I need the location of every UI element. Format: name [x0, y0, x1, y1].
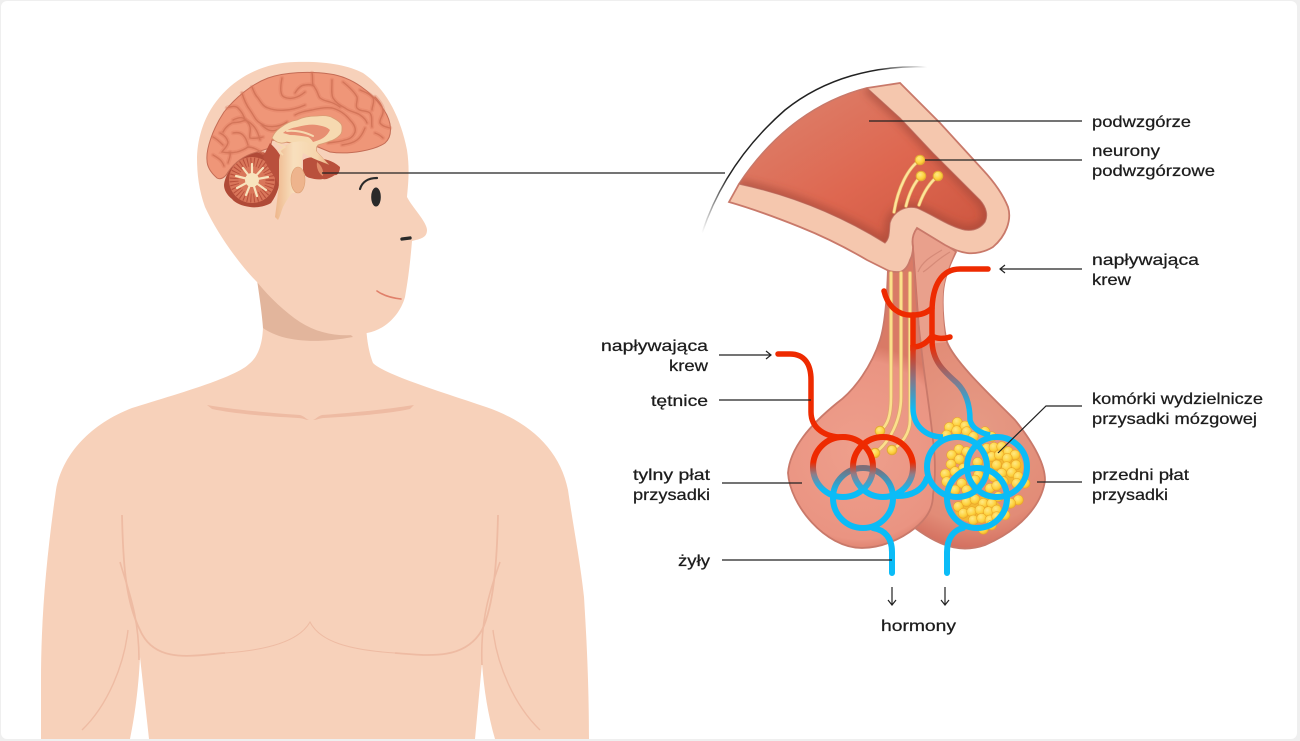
label: napływająca krew left — [601, 338, 709, 375]
label: przedni płat przysadki: przysadki — [1092, 487, 1168, 504]
posterior capillaries — [813, 437, 913, 528]
mouth — [377, 291, 401, 299]
head — [197, 62, 427, 335]
label: komórki wydzielnicze: komórki wydzielnicze — [1092, 391, 1263, 408]
cerebellum — [224, 152, 280, 207]
dark region behind stem — [263, 143, 280, 187]
posterior lobe — [788, 250, 935, 548]
eyebrow — [360, 178, 377, 189]
neurons — [915, 155, 943, 181]
hypothalamus — [739, 88, 987, 243]
label: tylny płat przysadki — [633, 467, 711, 504]
frontal dark region — [303, 157, 340, 179]
label: podwzgórze: podwzgórze — [1092, 114, 1191, 131]
anterior lobe — [905, 229, 1045, 549]
stalk overlay — [913, 229, 955, 345]
label: tylny płat przysadki: przysadki — [633, 487, 710, 504]
secretory cells — [940, 417, 1030, 534]
leader lines — [719, 121, 1082, 605]
torso — [41, 325, 589, 739]
magnifier arc — [702, 67, 927, 233]
frond — [277, 143, 285, 155]
small orange structure — [317, 162, 323, 176]
label: neurony podwzgórzowe — [1092, 143, 1215, 180]
collarbones — [207, 405, 414, 420]
label: napływająca krew left: napływająca — [601, 338, 708, 355]
neck shadow — [257, 280, 353, 341]
label: neurony podwzgórzowe: podwzgórzowe — [1092, 163, 1215, 180]
label: komórki wydzielnicze: przysadki mózgowej — [1092, 411, 1257, 428]
cerebrum — [207, 72, 391, 179]
label: przedni płat przysadki: przedni płat — [1092, 467, 1190, 484]
label: napływająca krew right — [1092, 252, 1199, 289]
label: przedni płat przysadki — [1092, 467, 1190, 504]
nostril — [402, 238, 410, 239]
arteries — [778, 269, 988, 437]
brain — [207, 72, 391, 220]
human figure — [41, 62, 589, 739]
label: napływająca krew left: krew — [669, 358, 709, 375]
label: tylny płat przysadki: tylny płat — [633, 467, 711, 484]
pituitary diagram — [729, 83, 1045, 573]
hypothalamus band — [729, 83, 1009, 272]
eye — [371, 188, 381, 206]
label: napływająca krew right: napływająca — [1092, 252, 1199, 269]
leader line from brain — [322, 172, 725, 174]
portal vessels — [913, 340, 990, 437]
brainstem — [275, 141, 328, 220]
pons — [291, 167, 305, 193]
label: neurony podwzgórzowe: neurony — [1092, 143, 1160, 160]
fiber ends — [870, 426, 897, 458]
upper neuron fibers — [894, 160, 938, 212]
lower fibers — [875, 273, 910, 453]
label: komórki wydzielnicze — [1092, 391, 1263, 428]
arm lines — [82, 630, 540, 730]
label: napływająca krew right: krew — [1092, 272, 1132, 289]
stalk stripes — [918, 250, 950, 272]
corpus callosum — [272, 116, 342, 164]
veins — [873, 437, 1027, 573]
inner arch — [283, 125, 330, 142]
label: tętnice: tętnice — [651, 393, 708, 410]
label: żyły: żyły — [678, 553, 710, 570]
fornix — [287, 131, 313, 136]
label: hormony: hormony — [881, 618, 956, 635]
chest lines — [120, 515, 500, 665]
